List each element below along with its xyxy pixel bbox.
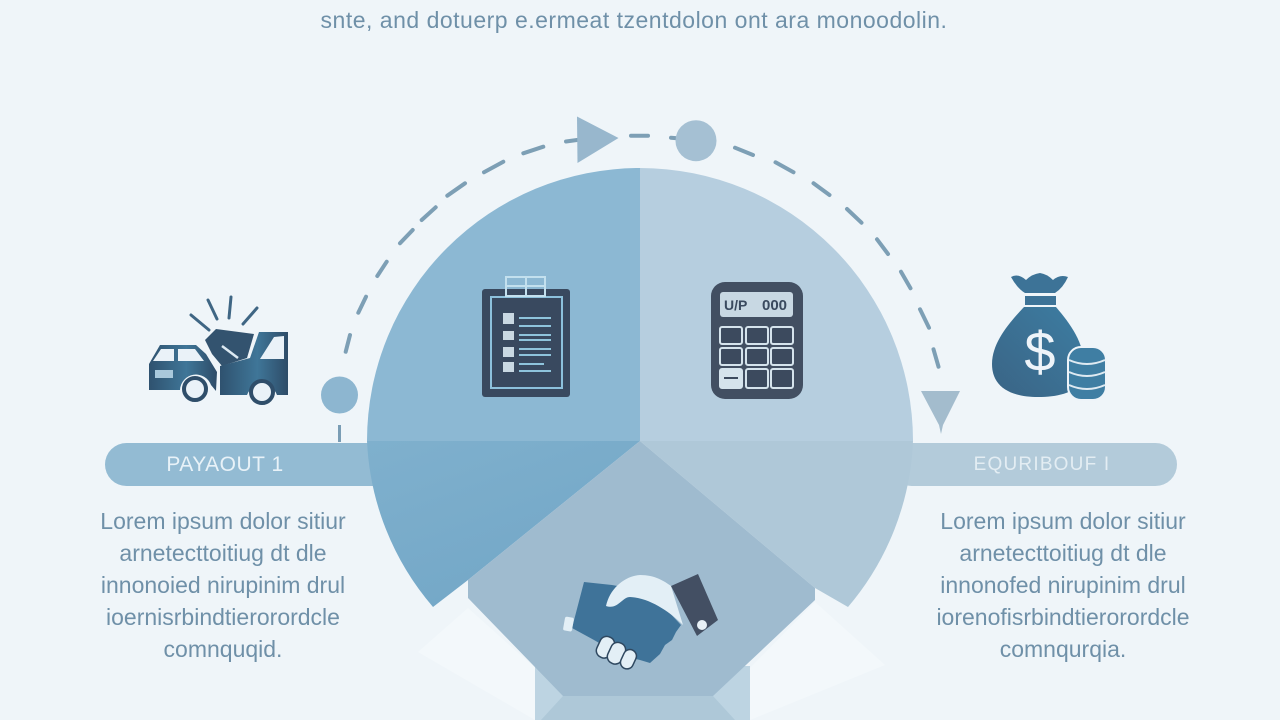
pie sector: lower right — [640, 441, 913, 607]
arrow: down triangle — [921, 391, 960, 434]
icon: money bag — [992, 273, 1106, 400]
text block: right: Lorem ipsum dolor sitiur — [940, 508, 1186, 534]
icon: money bag: $ — [1024, 320, 1056, 383]
icon: calculator: 000 — [762, 297, 787, 314]
text block: left: ioernisrbindtierorordcle — [106, 604, 340, 630]
text block: right: comnqurqia. — [1000, 636, 1126, 662]
pie sector: lower left — [367, 441, 640, 607]
hexagon: bottom panel — [468, 441, 815, 696]
icon: car crash — [149, 297, 288, 403]
text block: right: iorenofisrbindtierorordcle — [936, 604, 1190, 630]
bar label: right: EQURIBOUF I — [974, 454, 1110, 475]
pie sector: upper right — [640, 168, 913, 441]
bar label: payout: PAYAOUT 1 — [166, 453, 284, 476]
text block: left: arnetecttoitiug dt dle — [119, 540, 327, 566]
node: top circle — [676, 120, 716, 161]
text block: left: Lorem ipsum dolor sitiur — [100, 508, 346, 534]
stem below hexagon — [535, 666, 750, 720]
node: left circle — [321, 376, 358, 442]
text block: left: comnquqid. — [164, 636, 282, 662]
pie sector: upper left — [367, 168, 640, 441]
bar: payout left — [105, 443, 395, 486]
title text: snte, and dotuerp e.ermeat tzentdolon ont ara monoodolin. — [321, 7, 947, 33]
bar: right — [890, 443, 1177, 486]
dashed arc: left — [346, 140, 577, 352]
text block: left — [100, 508, 346, 662]
icon: clipboard — [482, 277, 570, 397]
background chevrons — [418, 602, 885, 720]
text block: right — [936, 508, 1190, 662]
dashed arc: top — [631, 136, 677, 138]
dashed arc: right — [735, 148, 938, 367]
text block: right: innonofed nirupinim drul — [940, 572, 1186, 598]
text block: left: innonoied nirupinim drul — [101, 572, 345, 598]
text block: right: arnetecttoitiug dt dle — [959, 540, 1167, 566]
icon: calculator: U/P — [724, 297, 747, 313]
icon: handshake — [563, 574, 718, 671]
icon: calculator — [711, 282, 803, 399]
arrow: top triangle — [577, 116, 618, 163]
